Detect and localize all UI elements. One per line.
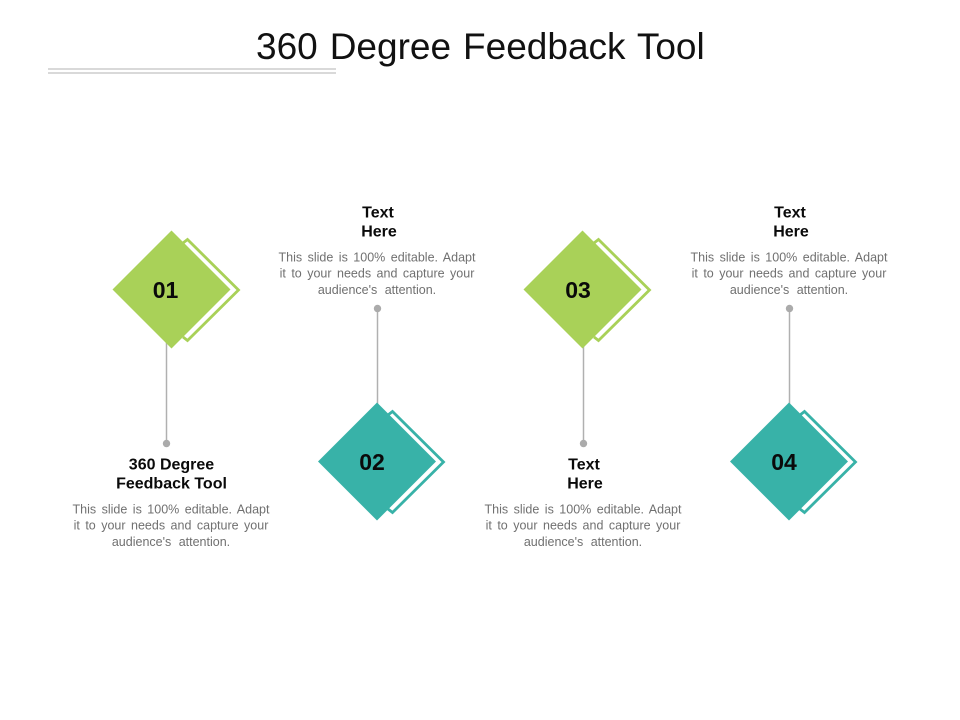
text block 03: Text xyxy=(568,456,601,474)
text block 01: it to your needs and capture your xyxy=(74,518,268,532)
connector 01 xyxy=(163,340,170,447)
number 02: 02 xyxy=(359,449,385,475)
diamond outline 01 xyxy=(183,240,238,340)
step 02 xyxy=(279,204,476,520)
text block 03: Here xyxy=(567,476,603,492)
text block 01: audience's attention. xyxy=(112,535,230,549)
text block 01: Feedback Tool xyxy=(116,476,227,492)
connector 03 xyxy=(580,340,587,447)
text block 02: Text xyxy=(362,204,395,222)
text block 04: This slide is 100% editable. Adapt xyxy=(691,250,888,264)
number 03: 03 xyxy=(565,277,591,303)
text block 04: it to your needs and capture your xyxy=(692,266,886,280)
text block 01: 360 Degree xyxy=(129,456,214,474)
connector 02 xyxy=(374,305,381,410)
text block 04: Here xyxy=(773,224,809,240)
text block 02: it to your needs and capture your xyxy=(280,266,474,280)
diamond outline 04 xyxy=(800,412,856,512)
text block 03 xyxy=(485,456,682,549)
text block 02 xyxy=(279,204,476,297)
step 01 xyxy=(73,230,270,549)
text block 02: Here xyxy=(361,224,397,240)
text block 02: audience's attention. xyxy=(318,283,436,297)
text block 03: audience's attention. xyxy=(524,535,642,549)
step 04 xyxy=(691,204,888,520)
text block 02: This slide is 100% editable. Adapt xyxy=(279,250,476,264)
step 03 xyxy=(485,230,682,549)
diamond 04 xyxy=(730,402,848,520)
diamond outline 03 xyxy=(594,240,650,340)
text block 03: it to your needs and capture your xyxy=(486,518,680,532)
diamond outline 02 xyxy=(388,412,444,512)
diamond 03 xyxy=(524,230,642,348)
connector 04 xyxy=(786,305,793,410)
title: 360 Degree Feedback Tool xyxy=(256,26,705,67)
diamond 01 xyxy=(112,230,230,348)
text block 01: This slide is 100% editable. Adapt xyxy=(73,502,270,516)
number 01: 01 xyxy=(153,277,178,303)
text block 04: Text xyxy=(774,204,807,222)
text block 04: audience's attention. xyxy=(730,283,848,297)
text block 03: This slide is 100% editable. Adapt xyxy=(485,502,682,516)
text block 04 xyxy=(691,204,888,297)
diamond 02 xyxy=(318,402,436,520)
text block 01 xyxy=(73,456,270,549)
number 04: 04 xyxy=(771,449,797,475)
title underline xyxy=(48,68,336,74)
